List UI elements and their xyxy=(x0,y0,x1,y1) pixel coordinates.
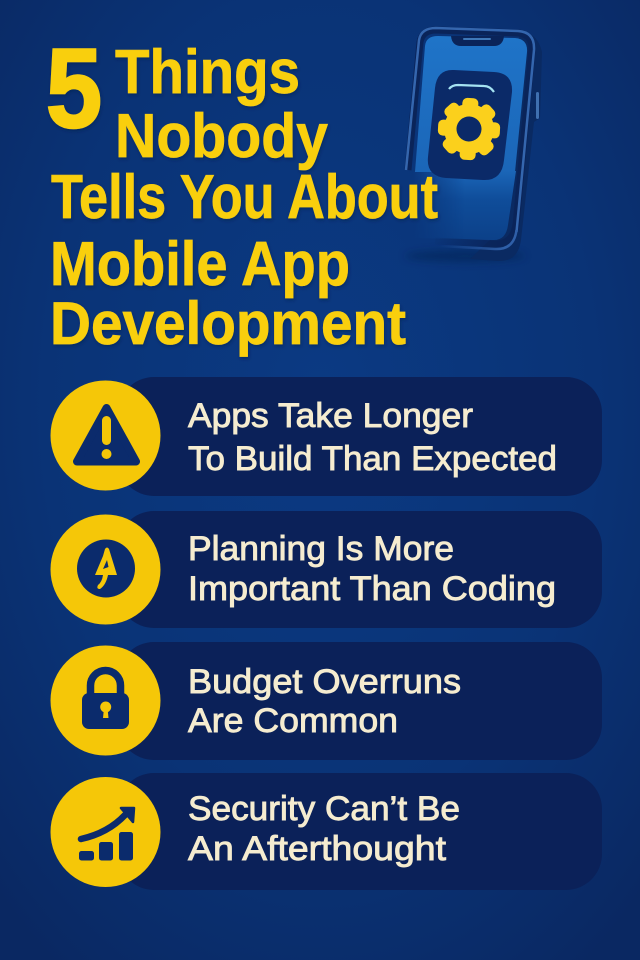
item text: Planning Is More xyxy=(188,530,454,568)
item text: Security Can’t Be xyxy=(188,790,460,828)
icon: gear xyxy=(436,96,502,162)
item 2: planning xyxy=(50,511,602,628)
title line: Nobody: Nobody xyxy=(115,102,328,171)
title xyxy=(46,26,438,357)
item text: Important Than Coding xyxy=(188,570,556,608)
item 4: security xyxy=(50,773,602,890)
illustration: phone with gear xyxy=(405,28,542,262)
panel xyxy=(118,773,602,890)
app tile xyxy=(428,70,512,180)
item 1: apps take longer xyxy=(50,377,602,496)
title line: Mobile App: Mobile App xyxy=(50,230,350,299)
icon: bolt badge xyxy=(50,514,160,624)
item 3: budget xyxy=(50,642,602,760)
panel xyxy=(118,377,602,496)
icon: padlock xyxy=(50,646,160,756)
title line: Tells You About: Tells You About xyxy=(51,163,438,232)
item text: Budget Overruns xyxy=(188,663,461,701)
highlight arc xyxy=(449,85,494,92)
title numeral 5: 5 xyxy=(46,26,102,151)
item text: Apps Take Longer xyxy=(188,397,473,435)
item text: Are Common xyxy=(188,702,398,740)
title line: Development: Development xyxy=(50,290,406,357)
title line: Things: Things xyxy=(115,38,300,107)
icon: growth chart xyxy=(50,777,160,887)
icon: warning triangle xyxy=(50,380,160,490)
item text: To Build Than Expected xyxy=(188,440,557,478)
item text: An Afterthought xyxy=(188,830,447,868)
panel xyxy=(118,642,602,760)
panel xyxy=(118,511,602,628)
